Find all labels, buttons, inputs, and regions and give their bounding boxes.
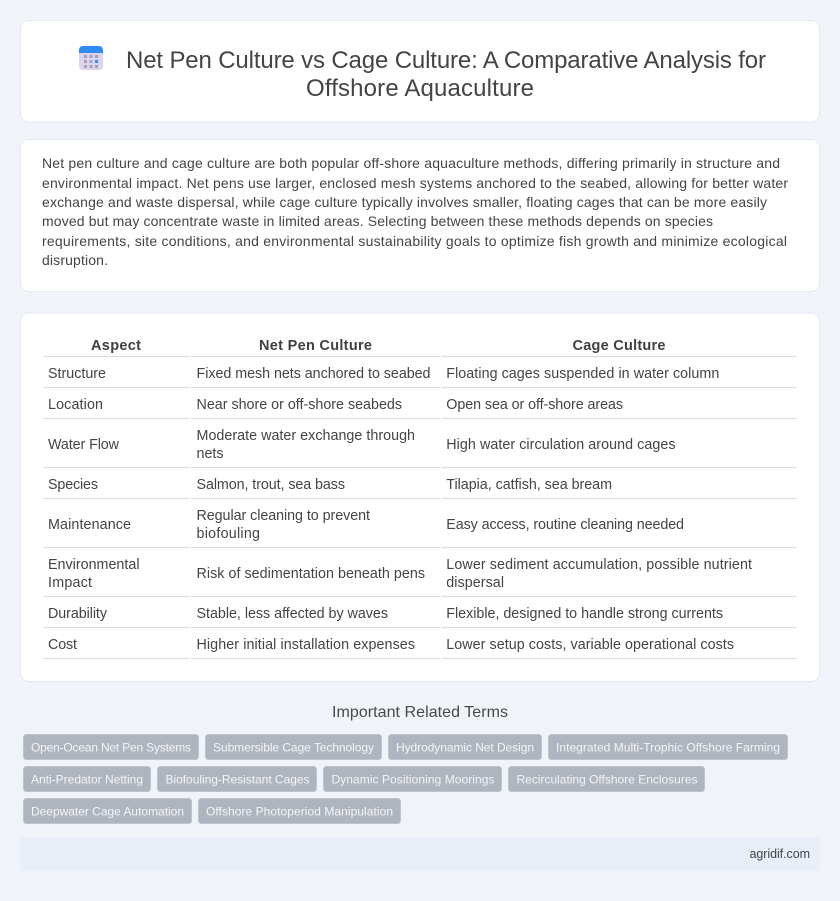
row: cost: Cost xyxy=(48,637,77,653)
row: maintenance xyxy=(48,508,684,542)
row: durability: Stable, less affected by waves xyxy=(196,606,388,622)
tags: related terms: Hydrodynamic Net Design xyxy=(396,740,534,754)
text block: introduction paragraph: requirements, site conditions, and environmental sustainability goals to optimize fish growth and minimize ecological xyxy=(42,233,787,249)
tags: related terms: Anti-Predator Netting xyxy=(31,772,143,786)
title xyxy=(126,47,766,102)
row: cost: Higher initial installation expenses xyxy=(196,637,415,653)
row: environmental impact: dispersal xyxy=(446,575,504,591)
panel: title header xyxy=(20,20,820,122)
footer: agridif.com xyxy=(750,847,810,861)
row: species: Salmon, trout, sea bass xyxy=(196,477,345,493)
row: maintenance: biofouling xyxy=(196,526,260,542)
text block: introduction paragraph: exchange and waste dispersal, while cage culture typically involves smaller, floating cages that can be more easily xyxy=(42,194,767,210)
tags: related terms: Open-Ocean Net Pen Systems xyxy=(31,740,191,754)
row: location: Open sea or off-shore areas xyxy=(446,397,623,413)
text block: introduction paragraph: moved but may concentrate waste in limited areas. Selecting between these methods depends on species xyxy=(42,213,713,229)
tags: related terms: Offshore Photoperiod Manipulation xyxy=(206,804,393,818)
row: water flow: Moderate water exchange through xyxy=(196,428,415,444)
panel: introduction xyxy=(20,140,820,292)
row: cost xyxy=(48,637,734,653)
tags: related terms: Recirculating Offshore Enclosures xyxy=(516,772,698,786)
tags: related terms: Biofouling-Resistant Cages xyxy=(166,772,310,786)
title: Net Pen Culture vs Cage Culture: A Comparative Analysis for xyxy=(126,47,766,74)
tags: related terms: Integrated Multi-Trophic Offshore Farming xyxy=(556,740,780,754)
row: environmental impact: Lower sediment accumulation, possible nutrient xyxy=(446,557,752,573)
row: environmental impact: Risk of sedimentation beneath pens xyxy=(196,566,425,582)
tags: related terms: Submersible Cage Technology xyxy=(213,740,374,754)
row: water flow: nets xyxy=(196,446,224,462)
row: location: Location xyxy=(48,397,103,413)
row: location: Near shore or off-shore seabeds xyxy=(196,397,402,413)
text block: introduction paragraph xyxy=(42,155,788,268)
footer xyxy=(20,837,820,871)
panel: comparison table xyxy=(20,313,820,682)
icon: calendar xyxy=(79,46,103,70)
row: durability xyxy=(48,606,723,622)
row: structure: Structure xyxy=(48,366,106,382)
table header row: Cage Culture xyxy=(572,338,666,354)
row: maintenance: Maintenance xyxy=(48,517,131,533)
table header row xyxy=(91,338,666,354)
tags: related terms: Deepwater Cage Automation xyxy=(31,804,184,818)
tags: related terms: Dynamic Positioning Moorings xyxy=(332,772,494,786)
row: water flow: Water Flow xyxy=(48,437,120,453)
row: species: Tilapia, catfish, sea bream xyxy=(446,477,612,493)
tags: related terms xyxy=(24,734,788,824)
text block: introduction paragraph: environmental impact. Net pens use larger, enclosed mesh systems anchored to the seabed, allowing for better water xyxy=(42,175,788,191)
row: environmental impact: Environmental xyxy=(48,557,140,573)
title: Offshore Aquaculture xyxy=(306,75,534,102)
row: environmental impact: Impact xyxy=(48,575,92,591)
row: water flow: High water circulation around cages xyxy=(446,437,676,453)
row: durability: Durability xyxy=(48,606,108,622)
heading: important related terms: Important Related Terms xyxy=(332,704,508,721)
row: durability: Flexible, designed to handle strong currents xyxy=(446,606,723,622)
row: environmental impact xyxy=(48,557,752,591)
text block: introduction paragraph: disruption. xyxy=(42,252,108,268)
row: cost: Lower setup costs, variable operational costs xyxy=(446,637,734,653)
row: maintenance: Regular cleaning to prevent xyxy=(196,508,370,524)
row: structure: Floating cages suspended in water column xyxy=(446,366,719,382)
row: location xyxy=(48,397,623,413)
row: structure xyxy=(48,366,719,382)
row: maintenance: Easy access, routine cleaning needed xyxy=(446,517,684,533)
table header row: Net Pen Culture xyxy=(259,338,372,354)
row: species: Species xyxy=(48,477,98,493)
row: water flow xyxy=(48,428,676,462)
row: species xyxy=(48,477,612,493)
table header row: Aspect xyxy=(91,338,141,354)
text block: introduction paragraph: Net pen culture and cage culture are both popular off-shore aquaculture methods, differing primarily in structure and xyxy=(42,155,780,171)
row: structure: Fixed mesh nets anchored to seabed xyxy=(196,366,431,382)
